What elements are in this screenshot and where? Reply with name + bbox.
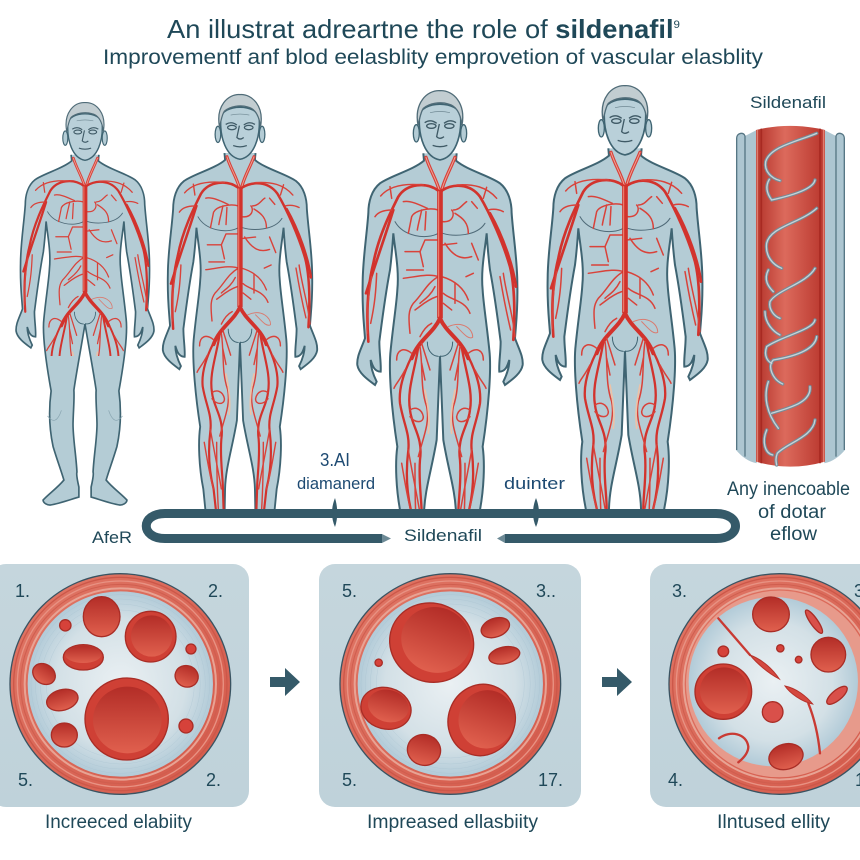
- arrow 2: [602, 668, 632, 696]
- figure 1: male body with limited arterial network: [16, 103, 154, 505]
- panel 2: numbers: [342, 581, 563, 790]
- title: An illustrat adreartne the role of sildenafil: [167, 14, 668, 44]
- label: after: AfeR: [92, 528, 132, 547]
- panel 1: vessel cross-section with cells: [9, 573, 231, 795]
- panel 1: numbers: 1.: [15, 581, 30, 601]
- panel 1: numbers: 2.: [208, 581, 223, 601]
- label: sildenafil on bar: Sildenafil: [404, 526, 482, 545]
- label: 3.AI: 3.AI: [320, 450, 350, 470]
- title: 9: [674, 19, 680, 31]
- panel 3: numbers: 3.: [672, 581, 687, 601]
- panel 3: numbers: 4.: [668, 770, 683, 790]
- panel 1: caption: Increeced elabiity: [45, 812, 192, 833]
- caption: vessel outcome: Any inencoable: [727, 479, 850, 500]
- label: sildenafil above vessel: Sildenafil: [750, 93, 826, 112]
- looped process arrow bar: [146, 498, 736, 543]
- caption: vessel outcome: eflow: [770, 524, 817, 545]
- panel 1: numbers: [15, 581, 223, 790]
- panel 3: background: [650, 564, 860, 807]
- label: diamanerd: diamanerd: [297, 474, 375, 493]
- panel 2: numbers: 3..: [536, 581, 556, 601]
- vessel cross-section with spiral fibres: [736, 126, 845, 467]
- figure 4: male body with arteries: [542, 86, 708, 542]
- panel 2: vessel cross-section with cells: [339, 573, 561, 795]
- panel 2: numbers: 5.: [342, 770, 357, 790]
- panel 2: caption: Impreased ellasbiity: [367, 812, 538, 833]
- figure 2: male body with arteries: [163, 95, 317, 520]
- panel 2: background: [319, 564, 581, 807]
- panel 1: background: [0, 564, 249, 807]
- arrow 1: [270, 668, 300, 696]
- panel 1: numbers: 5.: [18, 770, 33, 790]
- label: duinter: duinter: [504, 474, 565, 493]
- panel 3: caption: Ilntused ellity: [717, 812, 831, 833]
- subtitle: Improvementf anf blod eelasblity emprovetion of vascular elasblity: [103, 46, 764, 69]
- figure 3: male body with arteries: [357, 91, 523, 547]
- caption: vessel outcome: [727, 479, 850, 545]
- panel 1: numbers: 2.: [206, 770, 221, 790]
- panel 2: numbers: 5.: [342, 581, 357, 601]
- figure 1: pelvic arteries: [46, 290, 124, 356]
- caption: vessel outcome: of dotar: [758, 502, 827, 523]
- panel 3: vessel cross-section with damaged cells: [668, 573, 860, 795]
- panel 2: numbers: 17.: [538, 770, 563, 790]
- panel 3: numbers: [668, 581, 860, 790]
